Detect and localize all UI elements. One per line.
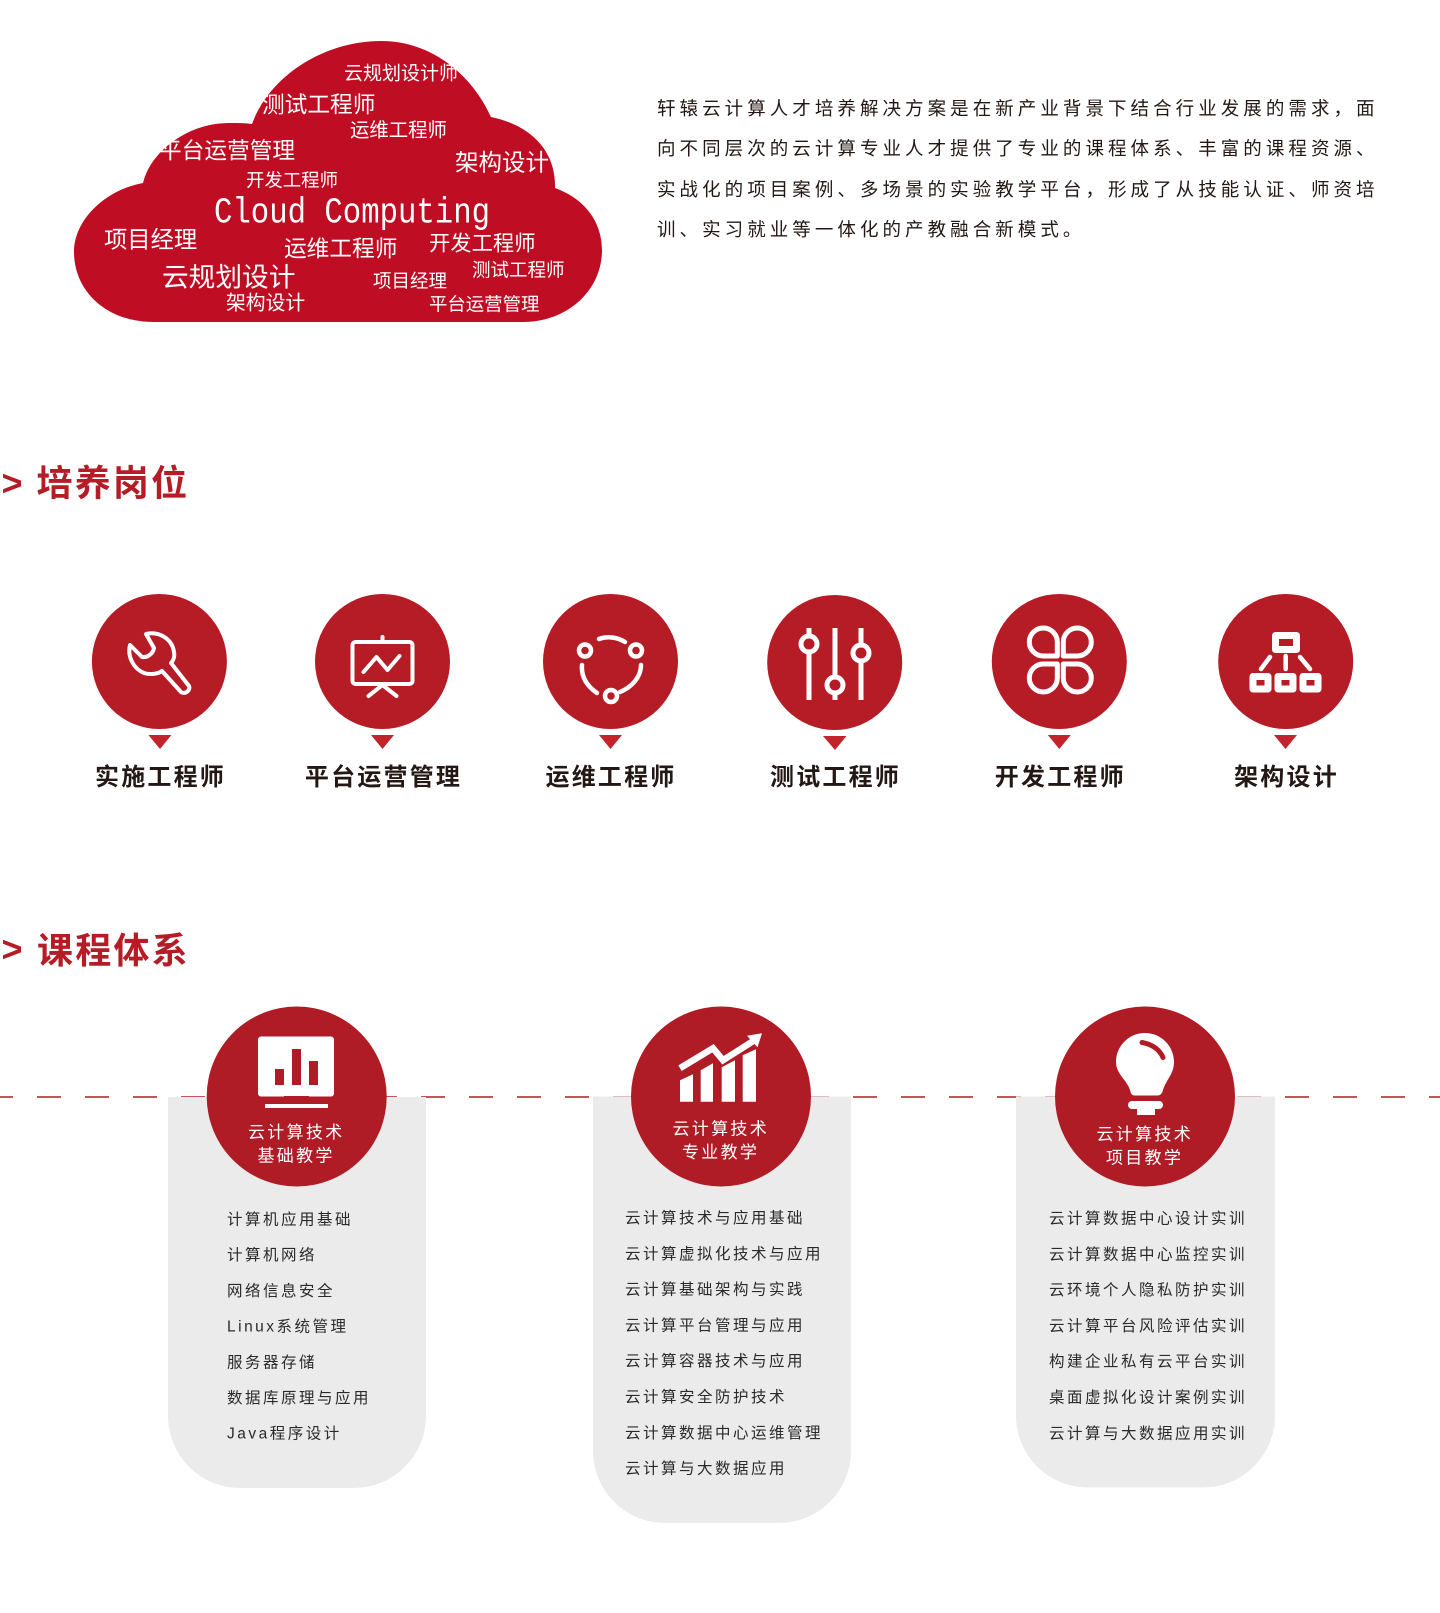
position: test engineer: 测试工程师 [770, 764, 901, 791]
course list [1049, 1208, 1247, 1442]
cloud words: 项目经理 [373, 268, 447, 294]
course list: 云计算与大数据应用实训 [1049, 1424, 1247, 1442]
intro paragraph: 训、实习就业等一体化的产教融合新模式。 [657, 219, 1085, 240]
panel: specialty courses [593, 1006, 851, 1523]
panel: project courses: 项目教学 [1106, 1148, 1183, 1168]
cloud shape [74, 41, 602, 322]
heading: training positions: > [2, 462, 25, 504]
cloud words: 架构设计 [226, 287, 305, 316]
panel: specialty courses: 云计算技术 [672, 1120, 769, 1138]
course list: 网络信息安全 [227, 1282, 335, 1300]
course list: 计算机应用基础 [227, 1210, 353, 1228]
icon: four petals [1029, 628, 1091, 692]
intro paragraph: 向不同层次的云计算专业人才提供了专业的课程体系、丰富的课程资源、 [657, 138, 1379, 159]
icon: org chart [1253, 636, 1318, 689]
course list: Java程序设计 [227, 1424, 342, 1442]
cloud words: 云规划设计师 [344, 59, 458, 86]
icon: rising bar chart [680, 1033, 762, 1102]
cloud words: 开发工程师 [429, 227, 536, 258]
position: test engineer [767, 595, 902, 791]
heading: training positions: 培养岗位 [36, 462, 189, 504]
cloud words: 平台运营管理 [429, 291, 539, 317]
course list: 计算机网络 [227, 1245, 317, 1264]
position: architecture design [1218, 594, 1353, 791]
intro paragraph [657, 98, 1379, 240]
position: implementation engineer [92, 594, 227, 791]
cloud words: Cloud Computing [214, 193, 490, 234]
icon: sliders [801, 628, 869, 700]
cloud words: 测试工程师 [262, 87, 375, 120]
cloud words: 运维工程师 [284, 231, 397, 264]
heading: curriculum: 课程体系 [37, 930, 190, 971]
cloud words: 项目经理 [104, 221, 197, 255]
panel: foundation courses: 云计算技术 [248, 1123, 344, 1142]
course list: 云计算基础架构与实践 [625, 1280, 805, 1298]
course list: 云环境个人隐私防护实训 [1049, 1280, 1247, 1299]
course list: 云计算技术与应用基础 [625, 1208, 805, 1227]
heading: curriculum: > [2, 928, 25, 970]
course list: 云计算平台管理与应用 [625, 1316, 805, 1334]
course list: 云计算与大数据应用 [625, 1458, 787, 1478]
course list [625, 1208, 823, 1478]
icon: light bulb [1116, 1033, 1174, 1115]
position: maintenance engineer: 运维工程师 [546, 764, 676, 791]
course list: 构建企业私有云平台实训 [1049, 1352, 1247, 1370]
panel: project courses: 云计算技术 [1096, 1125, 1193, 1144]
panel: specialty courses: 专业教学 [682, 1143, 759, 1162]
position: platform operations: 平台运营管理 [305, 763, 462, 791]
position: development engineer: 开发工程师 [995, 764, 1126, 791]
cloud words [104, 59, 565, 317]
panel: project courses [1016, 1006, 1275, 1488]
course list: 桌面虚拟化设计案例实训 [1049, 1388, 1247, 1406]
course list: 云计算数据中心运维管理 [625, 1423, 823, 1442]
icon: monitor bar chart [258, 1036, 334, 1108]
course list: 云计算安全防护技术 [625, 1387, 787, 1406]
panel: foundation courses [168, 1006, 426, 1488]
cloud word graphic [74, 41, 602, 322]
intro paragraph: 实战化的项目案例、多场景的实验教学平台，形成了从技能认证、师资培 [657, 179, 1379, 200]
course list: 服务器存储 [227, 1354, 317, 1372]
course list [227, 1210, 371, 1442]
panel: foundation courses: 基础教学 [258, 1146, 335, 1166]
position: platform operations [305, 594, 462, 791]
course list: Linux系统管理 [227, 1318, 349, 1336]
cloud words: 架构设计 [455, 144, 549, 178]
position: implementation engineer: 实施工程师 [95, 764, 226, 791]
icon: presentation board [352, 637, 412, 696]
course list: 云计算平台风险评估实训 [1049, 1316, 1247, 1335]
course list: 数据库原理与应用 [227, 1388, 371, 1407]
icon: wrench [129, 633, 189, 693]
course list: 云计算容器技术与应用 [625, 1351, 805, 1370]
icon: three-node cycle [579, 637, 642, 702]
intro paragraph: 轩辕云计算人才培养解决方案是在新产业背景下结合行业发展的需求，面 [657, 98, 1379, 119]
course list: 云计算虚拟化技术与应用 [625, 1244, 823, 1263]
cloud words: 云规划设计 [162, 256, 295, 295]
cloud words: 平台运营管理 [159, 133, 295, 166]
position: architecture design: 架构设计 [1234, 764, 1339, 791]
course list: 云计算数据中心设计实训 [1049, 1208, 1247, 1228]
cloud words: 开发工程师 [246, 167, 338, 193]
course list: 云计算数据中心监控实训 [1049, 1244, 1247, 1264]
position: maintenance engineer [543, 594, 678, 791]
cloud words: 运维工程师 [350, 114, 447, 143]
position: development engineer [992, 594, 1127, 791]
cloud words: 测试工程师 [472, 257, 565, 283]
